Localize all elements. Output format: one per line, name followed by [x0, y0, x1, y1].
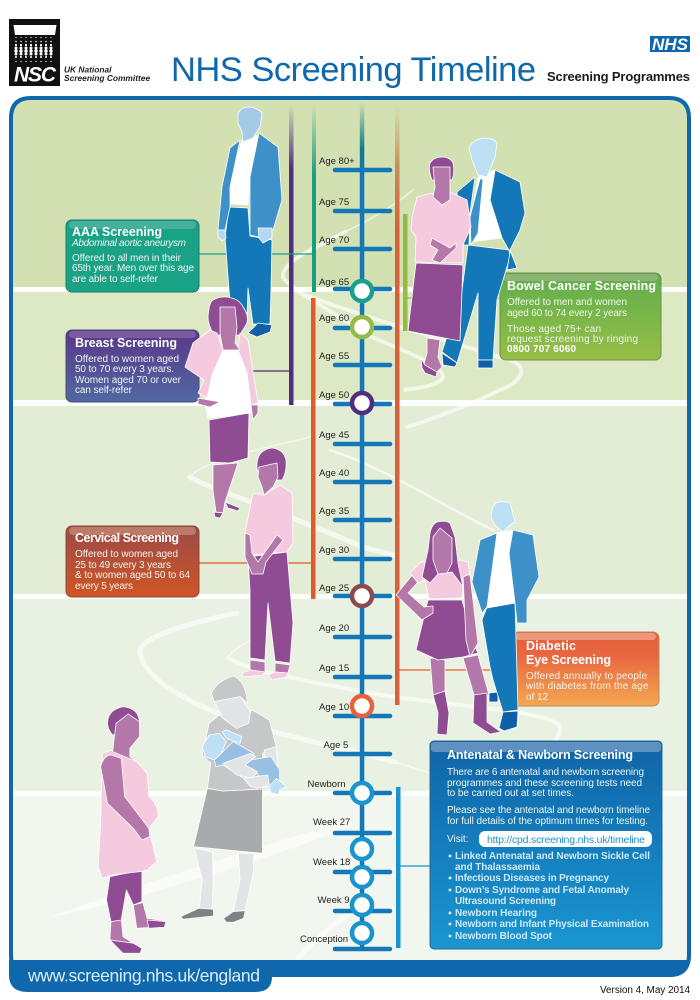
callout: AAA screening: AAA Screening — [72, 225, 162, 239]
figure: woman holding baby — [181, 676, 287, 922]
screening list: Infectious Diseases in Pregnancy — [455, 873, 609, 884]
callout: AAA screening — [66, 220, 199, 292]
NSC name: Screening Committee — [64, 73, 150, 83]
callout: bowel cancer screening: Those aged 75+ can — [507, 324, 601, 335]
age labels: Age 40 — [319, 468, 349, 479]
screening list: Newborn and Infant Physical Examination — [455, 919, 649, 930]
age labels: Age 50 — [319, 390, 349, 401]
bar: diabetic eye screening range — [395, 105, 400, 705]
callout: bowel cancer screening — [500, 273, 661, 360]
age labels: Week 18 — [313, 857, 350, 868]
callout: cervical screening: 25 to 49 every 3 years — [75, 560, 171, 571]
header — [9, 19, 690, 89]
figure: older man left — [218, 107, 282, 337]
callout: cervical screening: Offered to women aged — [75, 549, 178, 560]
screening list: Ultrasound Screening — [455, 896, 556, 907]
age labels: Age 10 — [319, 702, 349, 713]
age labels — [300, 156, 355, 945]
bar: cervical screening range — [311, 298, 316, 599]
website address: www.screening.nhs.uk/england — [27, 966, 260, 986]
bar: antenatal and newborn range — [396, 787, 400, 948]
callout: diabetic eye screening — [512, 632, 659, 706]
age labels: Age 60 — [319, 313, 349, 324]
callout: cervical screening: & to women aged 50 to 64 — [75, 570, 190, 581]
callout: breast screening: Offered to women aged — [75, 354, 179, 365]
screening list: and Thalassaemia — [455, 862, 540, 873]
callout: AAA screening: Offered to all men in their — [72, 253, 182, 264]
callout: breast screening — [66, 330, 199, 402]
callout: antenatal and newborn screening — [430, 741, 662, 949]
callout: antenatal and newborn screening: Visit: — [447, 834, 468, 845]
age labels: Week 27 — [313, 817, 350, 828]
callout: cervical screening — [66, 526, 199, 597]
callout: bowel cancer screening: 0800 707 6060 — [507, 344, 576, 355]
callout: bowel cancer screening: request screening by ringing — [507, 334, 638, 345]
callout: antenatal and newborn screening: Please see the antenatal and newborn timeline — [447, 805, 650, 816]
screening list: Newborn Hearing — [455, 908, 537, 919]
callout: antenatal and newborn screening: Antenatal & Newborn Screening — [447, 748, 633, 762]
callout: AAA screening: 65th year. Men over this age — [72, 263, 194, 274]
age labels: Age 35 — [319, 506, 349, 517]
connector lines — [199, 254, 516, 866]
callout: cervical screening: Cervical Screening — [75, 531, 179, 545]
callout: diabetic eye screening: of 12 — [526, 692, 548, 703]
age labels: Age 15 — [319, 663, 349, 674]
callout: breast screening: Women aged 70 or over — [75, 375, 182, 386]
NHS logo: NHS — [652, 35, 689, 54]
figure: pregnant woman — [98, 707, 166, 953]
callout: breast screening: Breast Screening — [75, 336, 177, 350]
callout: bowel cancer screening: Offered to men and women — [507, 297, 627, 308]
programme name: Screening Programmes — [547, 69, 690, 84]
bar: AAA screening range — [312, 105, 316, 292]
callout: AAA screening: Abdominal aortic aneurysm — [71, 238, 186, 249]
age labels: Age 70 — [319, 235, 349, 246]
age labels: Age 55 — [319, 351, 349, 362]
callout: antenatal and newborn screening: programmes and these screening tests need — [447, 778, 642, 789]
callout: antenatal and newborn screening: There are 6 antenatal and newborn screening — [447, 767, 644, 778]
callout: AAA screening: are able to self-refer — [72, 274, 159, 285]
NSC name: UK National — [64, 64, 112, 74]
callout: antenatal and newborn screening: for full details of the optimum times for testing. — [447, 816, 648, 827]
age labels: Age 75 — [319, 197, 349, 208]
timeline link — [479, 831, 652, 847]
age labels: Age 5 — [324, 740, 348, 751]
callout: bowel cancer screening: Bowel Cancer Screening — [507, 279, 656, 293]
callout: diabetic eye screening: Diabetic — [526, 639, 576, 653]
callout: cervical screening: every 5 years — [75, 581, 133, 592]
bar: breast screening range — [289, 105, 294, 405]
callout: antenatal and newborn screening: to be carried out at set times. — [447, 788, 574, 799]
figure: older couple — [408, 138, 525, 377]
callout: breast screening: can self-refer — [75, 385, 133, 396]
callout: diabetic eye screening: Eye Screening — [526, 653, 611, 667]
age labels: Age 30 — [319, 545, 349, 556]
winding road — [47, 190, 560, 958]
bar: bowel screening range — [403, 214, 408, 331]
age labels: Newborn — [308, 779, 346, 790]
screening list: Linked Antenatal and Newborn Sickle Cell — [455, 851, 650, 862]
NSC logo — [9, 19, 60, 86]
callout: bowel cancer screening: aged 60 to 74 every 2 years — [507, 308, 627, 319]
version note: Version 4, May 2014 — [600, 985, 690, 996]
figure: teenage couple — [396, 502, 539, 735]
age labels: Age 45 — [319, 430, 349, 441]
figure: woman breast screening age — [185, 297, 258, 518]
callout: diabetic eye screening: Offered annually to people — [526, 671, 647, 682]
age labels: Age 20 — [319, 623, 349, 634]
screening list: Down’s Syndrome and Fetal Anomaly — [455, 885, 629, 896]
age labels: Age 80+ — [319, 156, 355, 167]
title: NHS Screening Timeline — [171, 51, 536, 89]
age labels: Age 25 — [319, 583, 349, 594]
timeline — [300, 102, 390, 950]
timeline stops — [352, 281, 372, 943]
bottom bar — [9, 960, 689, 992]
screening list: Newborn Blood Spot — [455, 931, 553, 942]
age labels: Week 9 — [318, 895, 350, 906]
callout: diabetic eye screening: with diabetes from the age — [525, 681, 649, 692]
screening list — [448, 851, 650, 942]
timeline link: http://cpd.screening.nhs.uk/timeline — [487, 834, 645, 846]
NSC logo: NSC — [14, 64, 57, 86]
figure: woman cervical screening age — [242, 448, 293, 680]
callout: breast screening: 50 to 70 every 3 years. — [75, 364, 174, 375]
age labels: Conception — [300, 934, 348, 945]
age labels: Age 65 — [319, 277, 349, 288]
